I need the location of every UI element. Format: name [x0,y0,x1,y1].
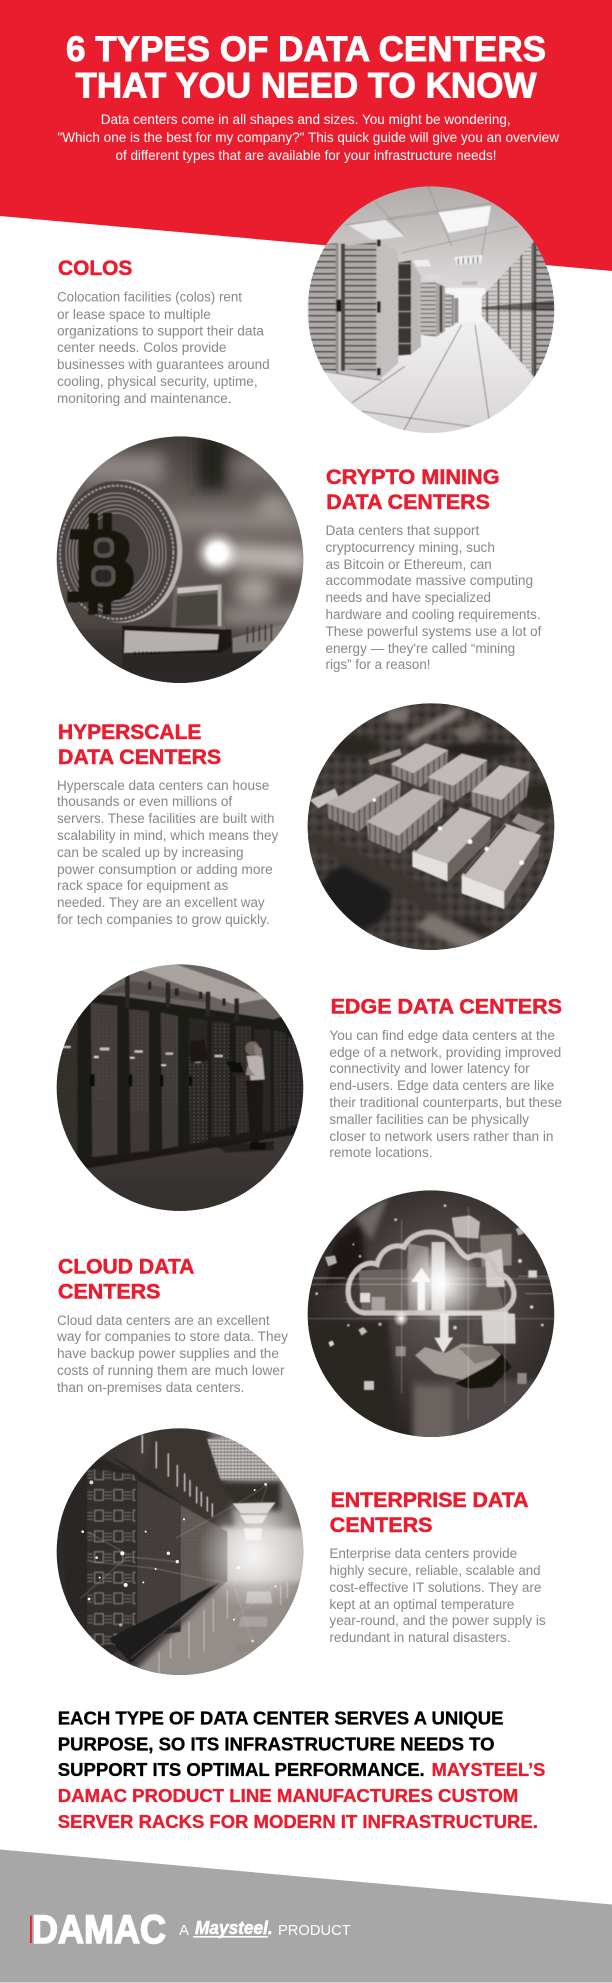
body: edge: their traditional counterparts, but these [329,1095,562,1110]
photo: aerial view of hyperscale campus [305,700,558,953]
body: hyperscale: can be scaled up by increasing [57,845,244,860]
body: cloud: than on-premises data centers. [57,1380,244,1395]
heading: cloud [58,1256,194,1304]
intro text: "Which one is the best for my company?" This quick guide will give you an overview [57,129,560,145]
intro text: of different types that are available for your infrastructure needs! [116,147,496,163]
closing statement: DAMAC PRODUCT LINE MANUFACTURES CUSTOM [58,1786,518,1806]
body: edge: edge of a network, providing improved [329,1045,561,1060]
heading: colos: COLOS [58,257,132,280]
heading: enterprise: ENTERPRISE DATA [331,1489,528,1512]
logo tagline: A [179,1923,189,1939]
photo: cloud over hand [305,1187,558,1444]
body: enterprise: Enterprise data centers provide [329,1546,517,1561]
body: enterprise: highly secure, reliable, scalable and [329,1563,541,1578]
closing statement: SUPPORT ITS OPTIMAL PERFORMANCE. [58,1760,425,1780]
photo: technician in server aisle [54,961,307,1218]
body: crypto mining: rigs” for a reason! [326,657,430,672]
body: enterprise: cost-effective IT solutions. They are [329,1580,541,1595]
heading: hyperscale [58,721,221,769]
body: crypto mining: These powerful systems use a lot of [326,624,542,639]
body: crypto mining [326,523,542,672]
photo: server room aisle [305,183,558,436]
body: enterprise: kept at an optimal temperature [329,1597,514,1612]
logo tagline [179,1918,351,1939]
logo wordmark: DAMAC [32,1908,166,1952]
body: hyperscale: for tech companies to grow quickly. [57,912,270,927]
body: crypto mining: energy — they're called “mining [326,641,515,656]
closing statement: MAYSTEEL’S [432,1760,545,1780]
body: hyperscale: servers. These facilities are built with [57,811,274,826]
body: crypto mining: Data centers that support [326,523,480,538]
closing statement: SERVER RACKS FOR MODERN IT INFRASTRUCTURE. [58,1812,538,1832]
intro text [57,111,560,163]
footer gray slanted band [0,1850,612,1982]
logo tagline: PRODUCT [278,1923,351,1939]
body: cloud: costs of running them are much lower [57,1363,285,1378]
heading: crypto mining: DATA CENTERS [326,491,490,514]
body: colos: businesses with guarantees around [57,357,270,372]
body: edge: closer to network users rather than in [329,1129,554,1144]
panel: cloud text [56,1256,288,1395]
body: cloud: way for companies to store data. They [56,1329,288,1344]
body: colos: Colocation facilities (colos) rent [57,290,242,305]
body: crypto mining: hardware and cooling requirements. [326,607,541,622]
body: enterprise: year-round, and the power supply is [329,1613,546,1628]
intro text: Data centers come in all shapes and sizes. You might be wondering, [101,111,511,127]
panel: crypto mining text [326,466,542,672]
title: 6 TYPES OF DATA CENTERS [66,30,546,69]
body: crypto mining: needs and have specialized [326,590,491,605]
closing statement: EACH TYPE OF DATA CENTER SERVES A UNIQUE [58,1708,504,1728]
body: hyperscale: scalability in mind, which means they [57,828,279,843]
body: edge: You can find edge data centers at the [329,1028,555,1043]
body: crypto mining: accommodate massive computing [326,573,533,588]
heading: crypto mining: CRYPTO MINING [326,466,500,489]
body: colos: monitoring and maintenance. [57,391,232,406]
body: colos: organizations to support their data [57,324,264,339]
body: crypto mining: cryptocurrency mining, such [326,540,495,555]
body: edge: smaller facilities can be physically [329,1112,529,1127]
title: THAT YOU NEED TO KNOW [76,66,536,106]
closing statement: PURPOSE, SO ITS INFRASTRUCTURE NEEDS TO [58,1734,495,1754]
body: hyperscale: power consumption or adding more [57,862,273,877]
heading: hyperscale: DATA CENTERS [58,746,221,769]
photo: enterprise data hall with network lines [54,1425,311,1682]
heading: enterprise [330,1489,528,1537]
body: hyperscale: Hyperscale data centers can house [57,778,269,793]
closing statement [58,1708,545,1832]
panel: hyperscale text [57,721,279,927]
body: cloud: have backup power supplies and the [57,1346,279,1361]
title [66,30,546,106]
body: edge: end-users. Edge data centers are like [329,1078,554,1093]
body: hyperscale: thousands or even millions of [57,794,232,809]
body: edge: remote locations. [329,1145,432,1160]
heading: edge: EDGE DATA CENTERS [331,996,562,1019]
body: enterprise: redundant in natural disasters. [329,1630,510,1645]
heading: cloud: CLOUD DATA [58,1256,194,1279]
logo accent bar [30,1916,32,1943]
body: colos: center needs. Colos provide [57,340,226,355]
logo: DAMAC, a Maysteel product [30,1908,351,1952]
panel: colos text [57,257,270,406]
heading: hyperscale: HYPERSCALE [58,721,201,744]
header red slanted band [0,0,612,271]
heading: enterprise: CENTERS [330,1514,432,1537]
body: enterprise [329,1546,546,1645]
heading: crypto mining [326,466,500,514]
panel: enterprise text [329,1489,546,1645]
body: cloud: Cloud data centers are an excellent [57,1313,270,1328]
photo: bitcoin coin on circuit board [54,433,307,686]
body: hyperscale: needed. They are an excellent way [57,895,265,910]
body: edge [329,1028,562,1160]
body: colos [57,290,270,406]
body: colos: cooling, physical security, uptime, [57,374,258,389]
heading: cloud: CENTERS [58,1281,160,1304]
panel: edge text [329,996,562,1160]
logo tagline: Maysteel. [195,1918,273,1938]
body: crypto mining: as Bitcoin or Ethereum, can [326,557,492,572]
body: cloud [56,1313,288,1395]
body: colos: or lease space to multiple [57,307,211,322]
body: hyperscale [57,778,279,927]
body: hyperscale: rack space for equipment as [57,878,229,893]
body: edge: connectivity and lower latency for [329,1061,530,1076]
